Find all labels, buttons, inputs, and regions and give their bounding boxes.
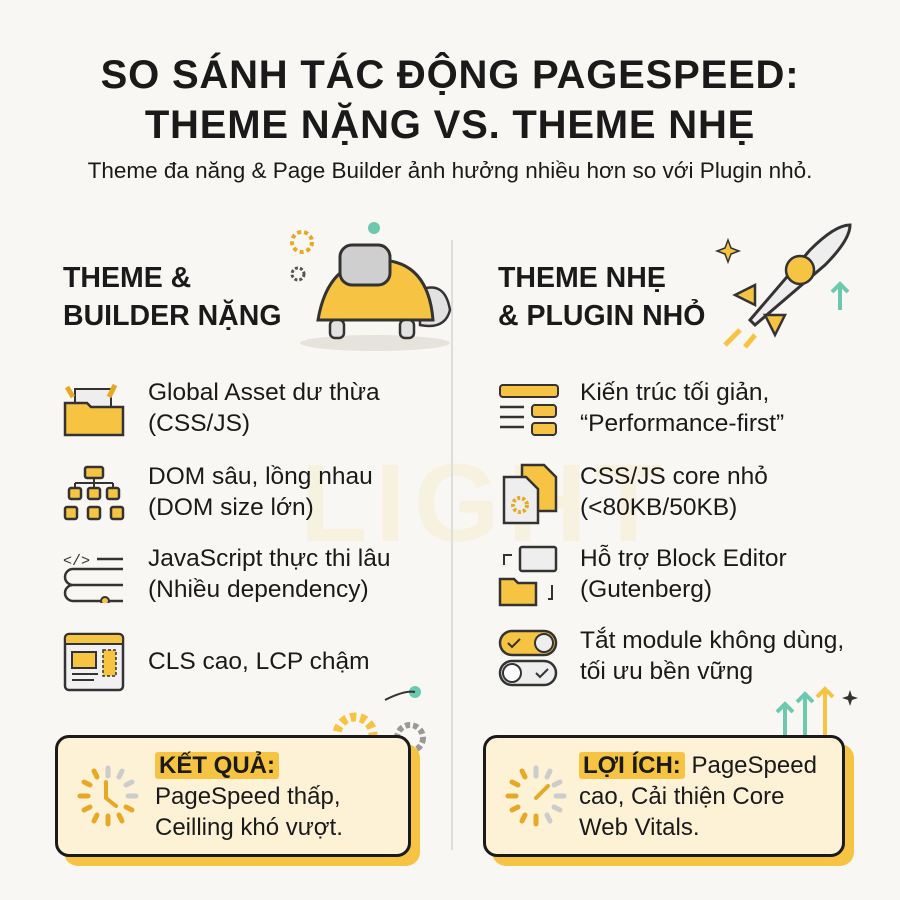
heading: light: & PLUGIN NHỎ	[498, 300, 705, 332]
item: DOM: DOM sâu, lồng nhau	[148, 463, 373, 490]
icon: tree	[64, 466, 124, 520]
item: block editor: Hỗ trợ Block Editor	[580, 545, 787, 572]
title: THEME NẶNG VS. THEME NHẸ	[145, 103, 755, 147]
icon: slow clock	[78, 766, 138, 826]
item: small core: (<80KB/50KB)	[580, 494, 737, 521]
callout: benefit: Web Vitals.	[579, 814, 700, 841]
item: block editor: (Gutenberg)	[580, 576, 712, 603]
item: CLS	[64, 632, 370, 692]
icon: switches	[498, 630, 558, 686]
panel: heavy theme	[55, 222, 452, 866]
divider	[451, 240, 453, 850]
item: global asset: Global Asset dư thừa	[148, 379, 380, 406]
item: small core: CSS/JS core nhỏ	[580, 463, 768, 490]
item: minimal: “Performance-first”	[580, 410, 784, 437]
callout: benefit: LỢI ÍCH: PageSpeed	[583, 752, 817, 779]
icon: blocks	[498, 546, 558, 606]
item: DOM: (DOM size lớn)	[148, 494, 314, 521]
item: JS	[63, 545, 390, 603]
heading: light	[498, 262, 705, 332]
callout: benefit: cao, Cải thiện Core	[579, 783, 784, 810]
item: small core	[502, 463, 768, 524]
callout: result: PageSpeed thấp,	[155, 783, 340, 810]
icon: code	[63, 553, 123, 603]
item: toggles: tối ưu bền vững	[580, 658, 753, 685]
callout: result: KẾT QUẢ:	[159, 752, 275, 779]
heading: heavy: THEME &	[63, 262, 191, 294]
heading: heavy: BUILDER NẶNG	[63, 300, 282, 332]
title	[101, 52, 799, 147]
callout: result: Ceilling khó vượt.	[155, 814, 343, 841]
icon: gears	[333, 686, 426, 752]
icon: turtle	[290, 222, 452, 351]
item: CLS: CLS cao, LCP chậm	[148, 648, 370, 675]
panel: light theme	[483, 224, 858, 866]
callout: benefit	[483, 735, 845, 857]
item: block editor	[498, 544, 787, 606]
icon: code: </>	[63, 553, 90, 570]
item: minimal: Kiến trúc tối giản,	[580, 379, 769, 406]
item: global asset: (CSS/JS)	[148, 410, 250, 437]
icon: layout	[499, 384, 559, 436]
item: JS: JavaScript thực thi lâu	[148, 545, 390, 572]
item: minimal	[499, 379, 784, 437]
callout: result	[55, 735, 411, 857]
icon: folder	[64, 384, 124, 436]
item: toggles: Tắt module không dùng,	[580, 627, 844, 654]
item: toggles	[498, 626, 844, 686]
icon: fast clock	[506, 766, 566, 826]
title: SO SÁNH TÁC ĐỘNG PAGESPEED:	[101, 53, 799, 97]
icon: browser	[64, 632, 124, 692]
item: DOM	[64, 463, 373, 521]
item: JS: (Nhiều dependency)	[148, 576, 369, 603]
heading: light: THEME NHẸ	[498, 262, 666, 294]
icon: files	[502, 464, 558, 524]
icon: rocket	[715, 224, 852, 349]
watermark: LIGHT	[300, 442, 670, 565]
heading: heavy	[63, 262, 282, 332]
icon: rising arrows	[776, 686, 858, 735]
item: global asset	[64, 379, 380, 437]
subtitle: Theme đa năng & Page Builder ảnh hưởng nhiều hơn so với Plugin nhỏ.	[88, 158, 812, 183]
